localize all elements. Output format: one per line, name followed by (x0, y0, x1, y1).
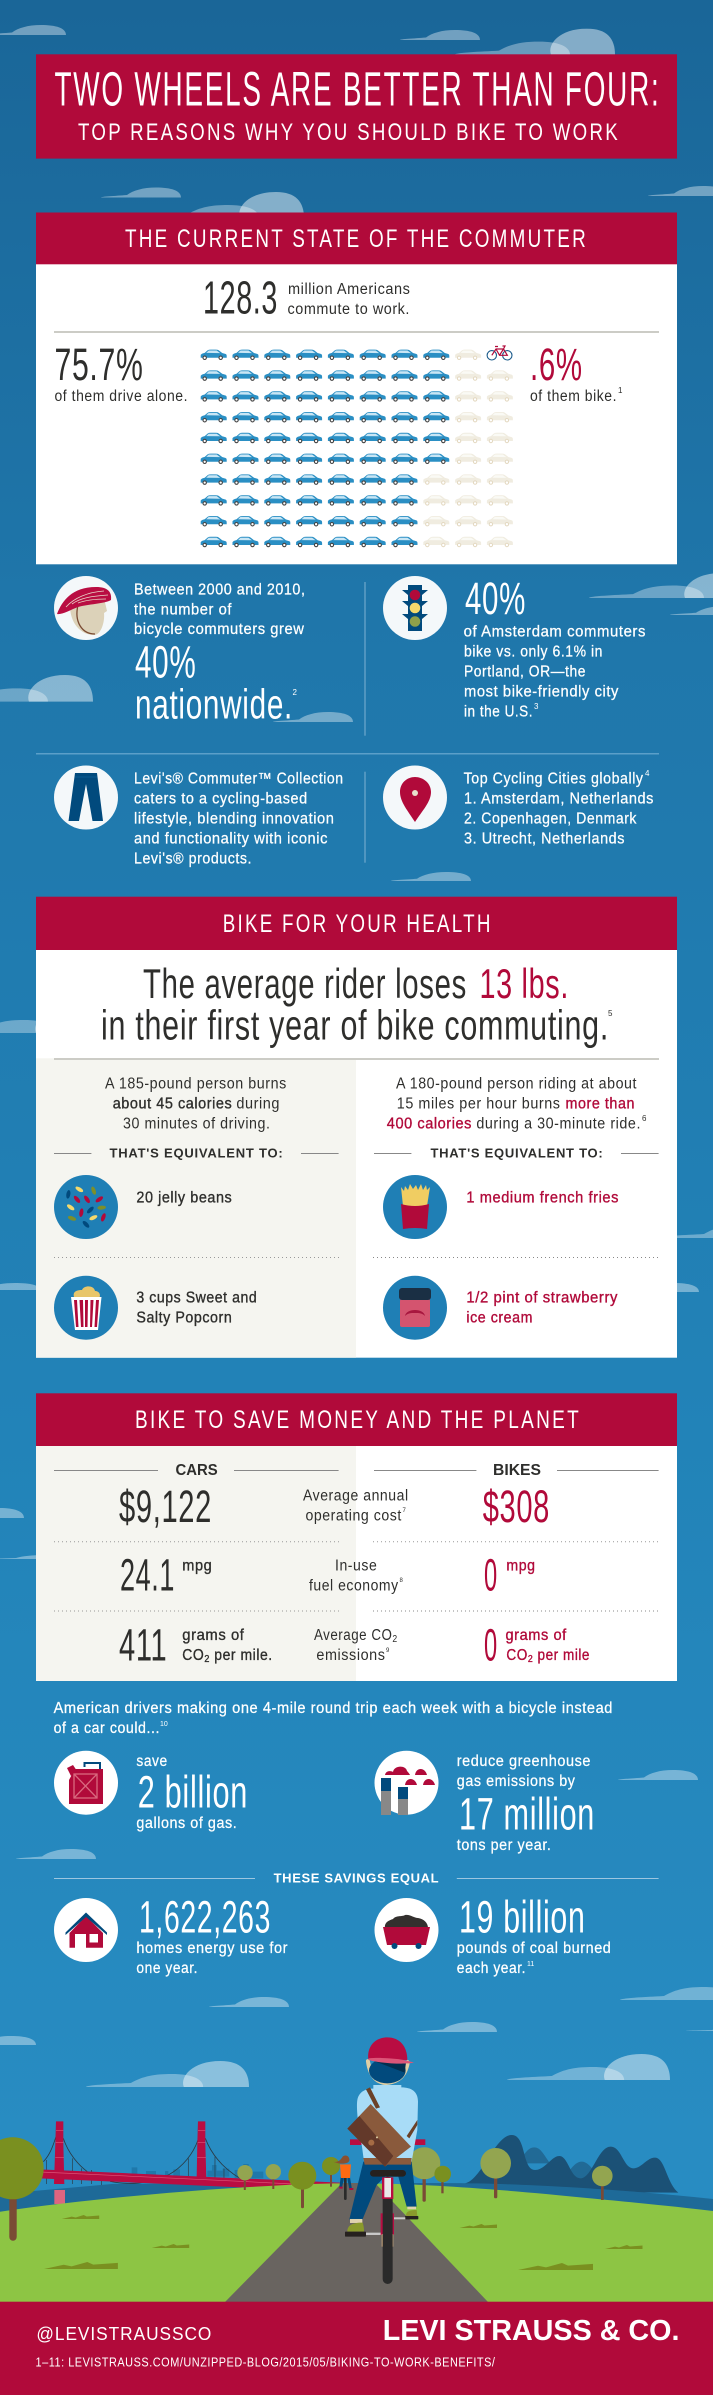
row: operating cost: operating cost (306, 1508, 402, 1525)
headline: 13 lbs: 13 lbs. (480, 960, 569, 1007)
row: fuel economy: In-use (335, 1558, 377, 1575)
stat: 128.3 million: 128.3 (203, 272, 278, 324)
row: CO2 emissions: 2 (528, 1654, 533, 1665)
text: caters to a cycling-based (134, 790, 308, 807)
text: 3 (534, 702, 539, 711)
text (134, 770, 344, 867)
left column: driving: during (236, 1095, 280, 1112)
row: fuel economy: 0 (484, 1550, 498, 1601)
main cyclist (345, 2037, 425, 2284)
icon: house (54, 1898, 118, 1962)
right column: biking (373, 1075, 660, 1340)
headline: 13 lbs (101, 960, 613, 1049)
row: operating cost: Average annual (303, 1488, 409, 1505)
column heading: cars: CARS (176, 1462, 218, 1479)
skyline (132, 2164, 263, 2178)
row: CO2 emissions: 2 (392, 1634, 398, 1645)
text: most bike-friendly city (464, 683, 619, 700)
water band right (400, 2183, 713, 2214)
text: of Amsterdam commuters (464, 623, 646, 640)
stat: homes energy use: homes energy use for (136, 1940, 288, 1957)
right column: biking: 1 medium french fries (466, 1190, 619, 1207)
row: operating cost: 7 (402, 1508, 406, 1514)
intro text: American drivers: 10 (160, 1721, 168, 1728)
text: the number of (134, 601, 232, 618)
row: CO2 emissions: grams of (506, 1627, 567, 1644)
column heading: bikes: BIKES (493, 1462, 541, 1479)
row: operating cost (119, 1481, 550, 1532)
row: CO2 emissions: 2 (204, 1654, 210, 1665)
text: 1. Amsterdam, Netherlands (464, 790, 654, 807)
text: Portland, OR—the (464, 663, 586, 680)
row: fuel economy: mpg (182, 1558, 212, 1575)
row: operating cost: $9,122 (119, 1481, 212, 1532)
stat: 17 million tons: 17 million (459, 1789, 595, 1840)
bicycle (370, 2170, 406, 2284)
section heading: BIKE TO SAVE MONEY AND THE PLANET (135, 1406, 581, 1434)
row: CO2 emissions: 411 (119, 1620, 167, 1671)
stat: 2 billion gallons: save (136, 1753, 168, 1770)
deck (40, 2169, 340, 2187)
stat: pounds of coal: each year. (457, 1960, 526, 1977)
row: fuel economy: 8 (400, 1578, 404, 1584)
text: 4 (645, 769, 650, 778)
stat: homes energy use (54, 1891, 288, 1977)
text: Levi's® products. (134, 850, 252, 867)
row: CO2 emissions (119, 1620, 590, 1671)
heading: these savings equal: THESE SAVINGS EQUAL (274, 1870, 439, 1885)
stat: homes energy use: 1,622,263 (139, 1891, 271, 1942)
right column: biking: 15 miles per hour burns (397, 1095, 560, 1112)
icon: bicycle (487, 346, 512, 360)
logotype: LEVI STRAUSS & CO. (383, 2315, 680, 2347)
right column: biking: A 180-pound person riding at about (396, 1075, 637, 1092)
stat: 17 million tons: tons per year. (457, 1837, 551, 1854)
text: 40% (135, 636, 196, 687)
stat: 17 million tons: reduce greenhouse (457, 1753, 591, 1770)
stat: 128.3 million: million Americans (288, 281, 410, 298)
row: CO2 emissions: CO (182, 1647, 207, 1664)
stat: 2 billion gallons: 2 billion (138, 1766, 248, 1817)
headline: 13 lbs: The average rider loses (143, 960, 467, 1007)
equivalent heading: THAT'S EQUIVALENT TO: (430, 1145, 603, 1160)
row: fuel economy: fuel economy (309, 1578, 399, 1595)
icon: gas can (54, 1751, 118, 1815)
stat: 128.3 million (203, 272, 410, 324)
road (225, 2183, 488, 2302)
icon: traffic light (383, 576, 447, 640)
stat: homes energy use: one year. (136, 1960, 198, 1977)
source line: 1–11: LEVISTRAUSS.COM/UNZIPPED-BLOG/2015/05/BIKING-TO-WORK-BENEFITS/ (36, 2356, 496, 2370)
stat: .6 percent bike: .6% (530, 339, 583, 390)
title banner (36, 54, 677, 159)
panel: the current state of the commuter (36, 212, 677, 564)
shirt (357, 2085, 418, 2162)
mountains (465, 2135, 678, 2193)
cables and suspenders (43, 2137, 240, 2183)
intro text: American drivers: American drivers making one 4-mile round trip each week with a bicycle instead (54, 1700, 613, 1717)
icon: map pin (383, 766, 447, 830)
grass tufts (44, 2215, 642, 2270)
rider legs (349, 2162, 385, 2221)
icon: jeans (54, 766, 118, 830)
icon: helmet (54, 576, 118, 640)
stat: 75.7 percent drive alone: of them drive alone. (54, 388, 188, 405)
left column: driving: 3 cups Sweet and (136, 1290, 257, 1307)
intro text: American drivers (54, 1700, 613, 1737)
row: fuel economy: 24.1 (120, 1550, 175, 1601)
text: lifestyle, blending innovation (134, 810, 334, 827)
green hill (0, 2183, 713, 2302)
small cyclist ahead (333, 2155, 353, 2200)
bag strap (366, 2087, 417, 2138)
footer (0, 2302, 713, 2395)
row: CO2 emissions: 9 (386, 1648, 390, 1654)
stat: 2 billion gallons: gallons of gas. (136, 1815, 237, 1832)
icon: coal cart (374, 1898, 438, 1962)
row: CO2 emissions: emissions (316, 1647, 386, 1664)
towers (54, 2121, 206, 2184)
stat: pounds of coal: 11 (527, 1961, 534, 1968)
text: and functionality with iconic (134, 830, 328, 847)
text: 2 (292, 688, 298, 697)
text (464, 573, 646, 720)
row: CO2 emissions: per mile. (210, 1647, 273, 1664)
pictogram: 100 commuters as cars (201, 350, 513, 547)
stat: pounds of coal (374, 1891, 611, 1977)
row: fuel economy (120, 1550, 536, 1601)
neck and head (366, 2037, 414, 2085)
left column: driving: 20 jelly beans (136, 1190, 232, 1207)
panel: bike to save money and the planet (36, 1393, 677, 1681)
row: CO2 emissions: Average CO (314, 1627, 405, 1644)
text: 40% (465, 573, 526, 624)
illustration: landscape with cyclist (0, 2037, 713, 2302)
row: CO2 emissions: CO (506, 1647, 531, 1664)
icon: jelly beans (54, 1175, 118, 1239)
icon: french fries (383, 1175, 447, 1239)
shoes and pedals (345, 2207, 418, 2237)
left column: driving: A 185-pound person burns (105, 1075, 287, 1092)
icon: ice cream pint (383, 1276, 447, 1340)
right column: biking: 6 (642, 1114, 647, 1123)
icon: popcorn (54, 1276, 118, 1340)
text: 3. Utrecht, Netherlands (464, 830, 625, 847)
right column: biking: 1/2 pint of strawberry (466, 1290, 618, 1307)
stat: pounds of coal: pounds of coal burned (457, 1940, 611, 1957)
right column: biking: ice cream (466, 1310, 533, 1327)
text: 2. Copenhagen, Denmark (464, 810, 637, 827)
icon: smokestacks (374, 1751, 438, 1815)
text (464, 769, 654, 847)
row: CO2 emissions: per mile (533, 1647, 590, 1664)
right column: biking: more than (566, 1095, 635, 1112)
text (134, 581, 306, 728)
water band left (0, 2183, 350, 2214)
row: operating cost: $308 (483, 1481, 550, 1532)
text: bike vs. only 6.1% in (464, 643, 603, 660)
stat: 2 billion gallons (54, 1751, 248, 1832)
left column: driving: about 45 calories (113, 1095, 232, 1112)
twitter handle: @LEVISTRAUSSCO (36, 2324, 212, 2344)
stat: .6 percent bike: of them bike. (530, 388, 617, 405)
equivalent heading: THAT'S EQUIVALENT TO: (110, 1145, 283, 1160)
text: Top Cycling Cities globally (464, 770, 644, 787)
callout: bicycle commuters grew 40 percent (54, 576, 306, 728)
callout: top cycling cities (383, 766, 654, 847)
callout: Levi's Commuter collection (54, 766, 344, 867)
text: nationwide. (135, 681, 293, 728)
stat: 128.3 million: commute to work. (288, 301, 410, 318)
headline: 13 lbs: 5 (608, 1009, 613, 1018)
belt (363, 2158, 412, 2165)
stat: 17 million tons (374, 1751, 595, 1854)
pink pier (54, 2190, 65, 2204)
panel: bike for your health (36, 897, 677, 1358)
row: fuel economy: mpg (506, 1558, 536, 1575)
section heading: BIKE FOR YOUR HEALTH (223, 910, 493, 938)
intro text: American drivers: of a car could... (54, 1720, 160, 1737)
left column: driving: 30 minutes of driving. (123, 1115, 270, 1132)
text: bicycle commuters grew (134, 621, 305, 638)
text: Levi's® Commuter™ Collection (134, 770, 344, 787)
left column: driving: Salty Popcorn (136, 1310, 232, 1327)
trees (0, 2137, 613, 2241)
stat: 17 million tons: gas emissions by (457, 1773, 576, 1790)
right column: biking: during a 30-minute ride. (476, 1115, 641, 1132)
left column: driving (54, 1075, 340, 1340)
Golden Gate bridge (40, 2121, 340, 2204)
right column: biking: 400 calories (387, 1115, 472, 1132)
callout: Amsterdam 40 percent (383, 573, 646, 720)
messenger bag (347, 2104, 411, 2167)
stat: pounds of coal: 19 billion (459, 1891, 586, 1942)
row: CO2 emissions: 0 (484, 1620, 498, 1671)
text: Between 2000 and 2010, (134, 581, 306, 598)
stat: .6 percent bike: 1 (618, 386, 623, 395)
handlebar (350, 2139, 425, 2145)
stat: 75.7 percent drive alone: 75.7% (54, 339, 144, 390)
row: CO2 emissions: grams of (182, 1627, 245, 1644)
text: in the U.S. (464, 703, 533, 720)
stat: .6 percent bike (530, 339, 623, 405)
